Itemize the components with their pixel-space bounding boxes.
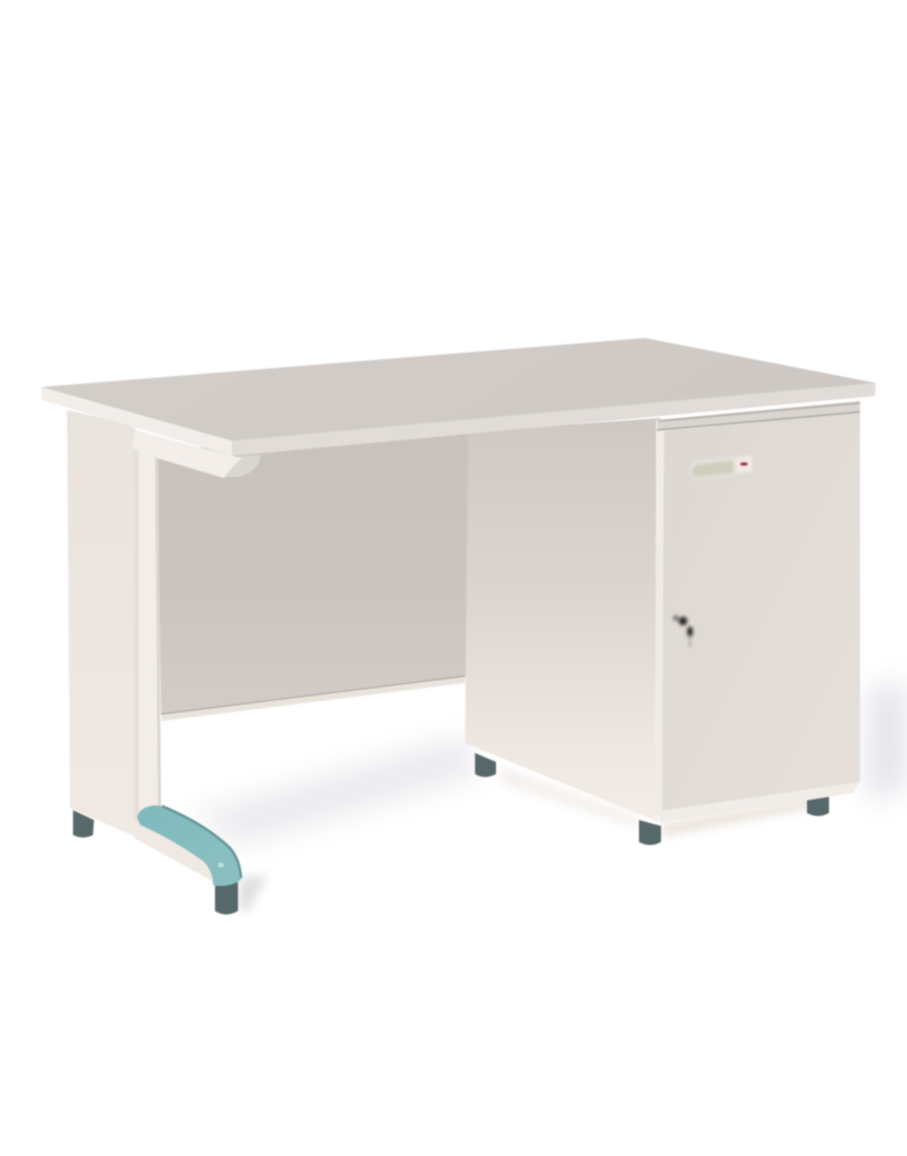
- floor shadows: [190, 680, 907, 912]
- cabinet side panel: [465, 418, 660, 822]
- door lock and key: [673, 615, 693, 647]
- back panel lower rail: [161, 675, 465, 721]
- desk top surface: [41, 338, 876, 441]
- rear cabinet foot peg: [475, 753, 496, 777]
- cabinet door: [660, 412, 860, 811]
- cabinet top rail: [657, 401, 860, 431]
- desk body: [41, 338, 876, 914]
- cabinet frame and base: [655, 420, 860, 823]
- desk top bracket: [133, 430, 261, 478]
- back panel: [157, 430, 470, 714]
- desk top left edge: [41, 387, 232, 456]
- rear left foot peg: [73, 810, 94, 838]
- left foot lower plate: [134, 820, 214, 882]
- right cabinet foot peg: [807, 796, 829, 816]
- door label holder: [690, 456, 752, 479]
- left leg outer panel: [67, 410, 134, 836]
- left foot teal cover: [137, 805, 241, 886]
- desk top front edge: [232, 383, 876, 456]
- left leg front strip: [133, 426, 161, 830]
- front cabinet foot peg: [639, 820, 661, 845]
- left foot peg: [215, 882, 238, 914]
